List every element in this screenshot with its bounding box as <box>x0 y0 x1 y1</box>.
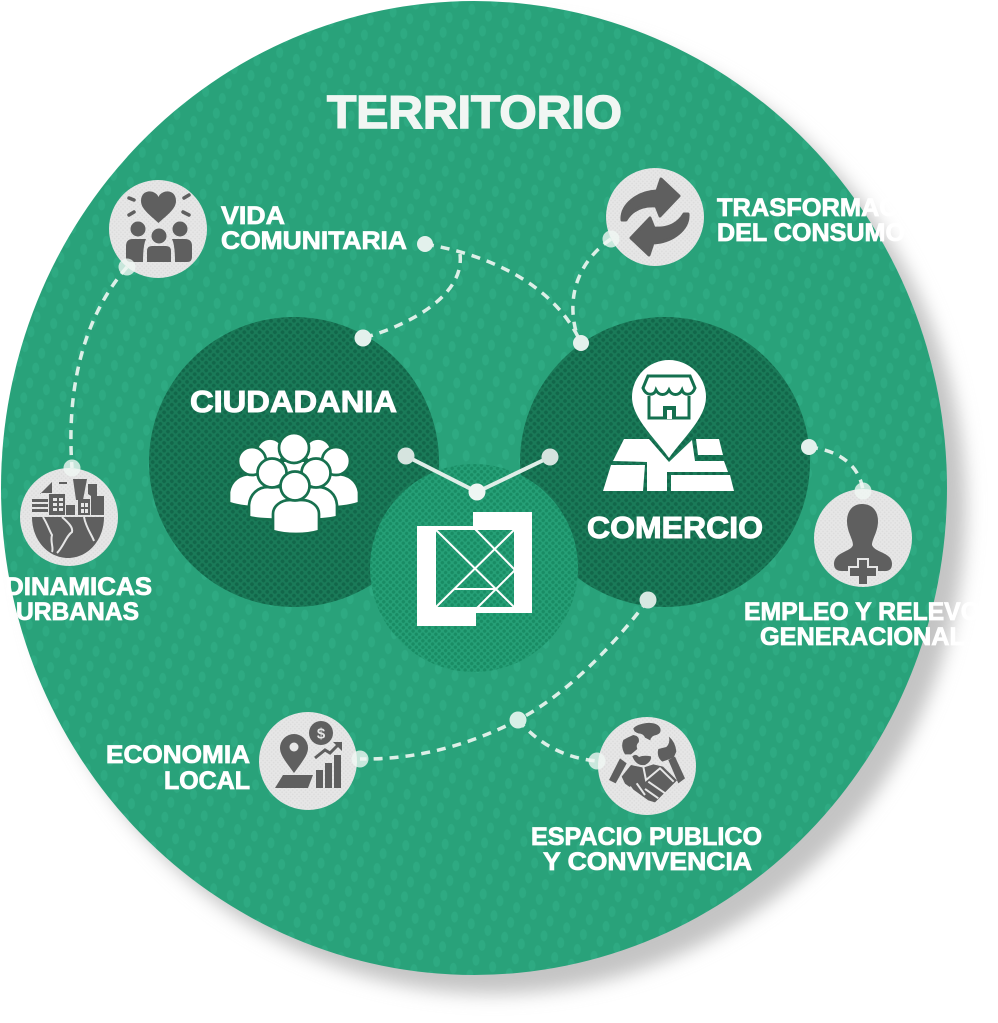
label: URBANAS <box>16 598 139 626</box>
item: empleo y relevo generacional <box>744 489 980 651</box>
item: vida comunitaria <box>109 180 407 278</box>
label <box>717 192 943 247</box>
connector: dashed lines <box>71 239 863 761</box>
icon: store location pin on map <box>603 360 734 491</box>
panel: comercio circle <box>520 317 810 607</box>
label <box>5 573 152 626</box>
panel: center logo circle <box>370 464 578 672</box>
label: GENERACIONAL <box>760 623 965 651</box>
nodes over icons <box>64 230 872 770</box>
label: ECONOMIA <box>106 741 250 769</box>
label <box>744 598 980 651</box>
label: DEL CONSUMO <box>717 219 905 247</box>
icon: puzzle and handshake <box>598 717 696 815</box>
icon: city on globe <box>20 468 118 566</box>
item: espacio publico y convivencia <box>531 717 762 876</box>
label: Y CONVIVENCIA <box>543 848 752 876</box>
icon: crowd of people <box>229 433 359 534</box>
logo <box>417 512 532 626</box>
label: LOCAL <box>164 767 250 795</box>
nodes <box>354 236 817 728</box>
icon: location and growth chart: $ <box>317 726 326 742</box>
icon: person with plus <box>814 489 912 587</box>
label <box>221 202 407 255</box>
label: TRASFORMACIÓN <box>717 192 943 222</box>
icon: recycle arrows <box>606 168 704 266</box>
panel: ciudadania circle <box>149 317 439 607</box>
label: DINAMICAS <box>5 573 152 601</box>
connector: logo link lines <box>406 456 550 492</box>
item: dinamicas urbanas <box>5 468 152 626</box>
label <box>106 741 250 795</box>
icon: location and growth chart <box>259 712 357 810</box>
item: economia local <box>106 712 357 810</box>
label: EMPLEO Y RELEVO <box>744 598 980 626</box>
label <box>531 823 762 876</box>
heading: CIUDADANIA: CIUDADANIA <box>190 384 397 419</box>
heading: COMERCIO: COMERCIO <box>587 510 763 545</box>
label: COMUNITARIA <box>221 227 407 255</box>
item: transformacion del consumo <box>606 168 943 266</box>
title: TERRITORIO: TERRITORIO <box>327 86 622 138</box>
label: VIDA <box>221 202 285 230</box>
label: ESPACIO PUBLICO <box>531 823 762 851</box>
icon: community heart <box>109 180 207 278</box>
